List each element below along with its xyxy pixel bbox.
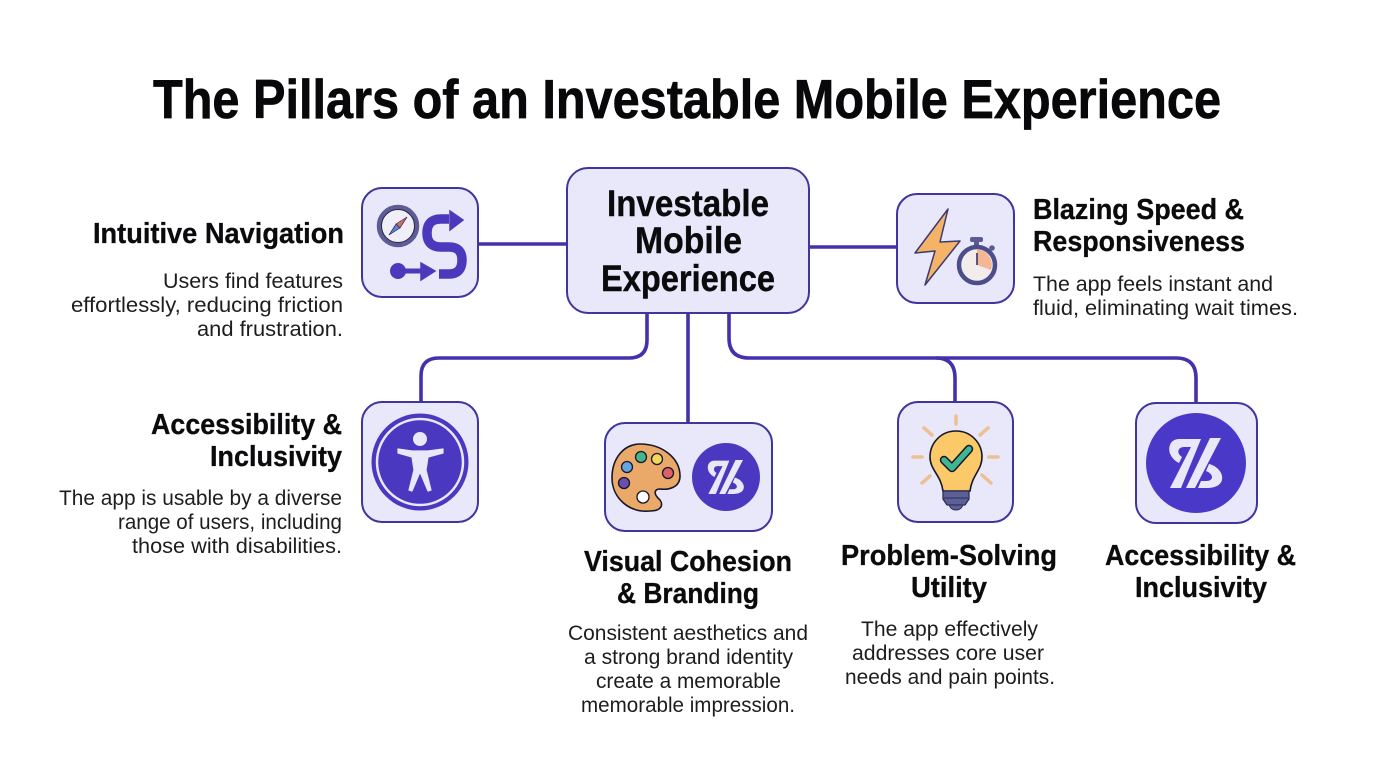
icon: light bulb with check — [913, 416, 998, 510]
heading: Accessibility & — [151, 409, 342, 441]
description: create a memorable — [596, 670, 781, 693]
heading — [841, 540, 1057, 604]
panel: problem-solving utility — [841, 402, 1057, 689]
description: Users find features — [163, 270, 343, 293]
central hub card: Investable — [607, 182, 769, 224]
heading: Responsiveness — [1033, 226, 1245, 258]
heading: Problem-Solving — [841, 540, 1057, 572]
description — [845, 618, 1055, 689]
panel: blazing speed — [897, 194, 1298, 320]
heading: Blazing Speed & — [1033, 194, 1244, 226]
heading: Inclusivity — [210, 441, 342, 473]
description: The app is usable by a diverse — [59, 487, 342, 510]
central hub card: Experience — [601, 257, 775, 299]
description: memorable impression. — [581, 694, 795, 717]
description — [1033, 273, 1298, 320]
central hub card — [567, 168, 809, 313]
description: a strong brand identity — [584, 646, 794, 669]
connectors — [421, 244, 1196, 423]
icon: compass and route — [379, 207, 463, 280]
heading — [151, 409, 342, 473]
central hub card: Mobile — [635, 219, 742, 261]
description — [59, 487, 342, 558]
heading: Utility — [911, 572, 987, 604]
heading: Visual Cohesion — [584, 546, 792, 578]
description: effortlessly, reducing friction — [71, 294, 343, 317]
heading — [584, 546, 792, 610]
heading: & Branding — [617, 578, 759, 610]
description: and frustration. — [197, 318, 343, 341]
icon: accessibility figure — [372, 414, 468, 510]
panel: visual cohesion and branding — [568, 423, 808, 717]
description: fluid, eliminating wait times. — [1033, 297, 1298, 320]
description: The app feels instant and — [1033, 273, 1273, 296]
description: Consistent aesthetics and — [568, 622, 808, 645]
description — [71, 270, 343, 341]
heading — [1105, 540, 1296, 604]
heading — [1033, 194, 1245, 258]
heading: Intuitive Navigation — [93, 218, 344, 250]
panel: accessibility and inclusivity (right) — [1105, 403, 1296, 604]
description — [568, 622, 808, 717]
description: The app effectively — [861, 618, 1038, 641]
icon: lightning and stopwatch — [915, 209, 995, 285]
description: range of users, including — [118, 511, 342, 534]
title: The Pillars of an Investable Mobile Experience — [153, 68, 1221, 130]
icon: brand logo small — [692, 443, 760, 511]
panel: accessibility and inclusivity (left) — [59, 402, 478, 558]
description: needs and pain points. — [845, 666, 1055, 689]
description: those with disabilities. — [132, 535, 342, 558]
panel: intuitive navigation — [71, 188, 478, 341]
heading: Inclusivity — [1135, 572, 1267, 604]
icon: paint palette — [612, 444, 680, 511]
icon: brand logo large — [1146, 413, 1246, 513]
description: addresses core user — [852, 642, 1044, 665]
heading: Accessibility & — [1105, 540, 1296, 572]
